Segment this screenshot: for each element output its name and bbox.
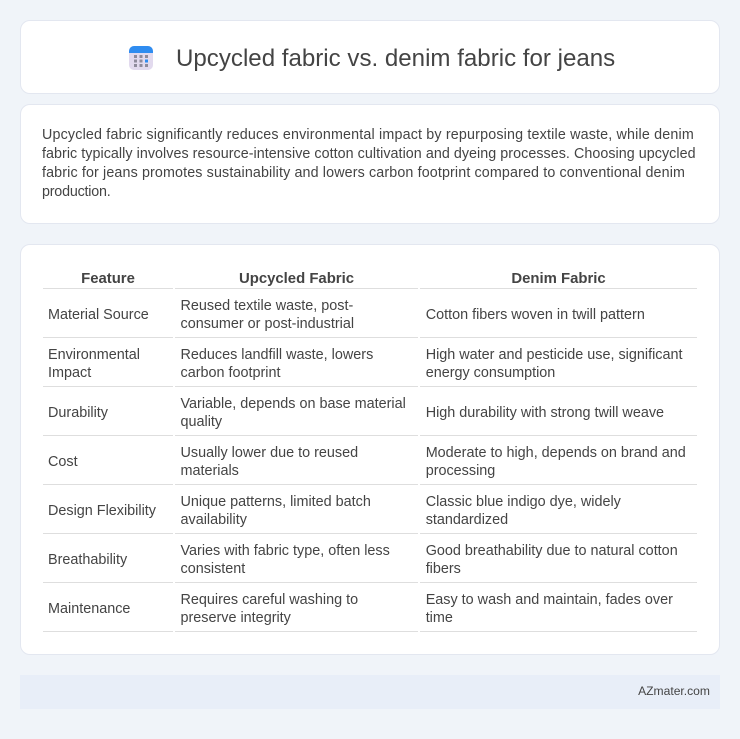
row: Environmental Impact: energy consumption [426, 365, 555, 381]
row: Maintenance: Easy to wash and maintain, fades over [426, 592, 673, 608]
row: Durability: Durability [48, 405, 108, 421]
row: Design Flexibility: availability [180, 512, 247, 528]
row: Material Source: Cotton fibers woven in twill pattern [426, 307, 645, 323]
row: Maintenance: Maintenance [48, 601, 130, 617]
row: Material Source: Reused textile waste, post- [180, 298, 353, 314]
row: Environmental Impact: High water and pesticide use, significant [426, 347, 682, 363]
row: Cost: Moderate to high, depends on brand and [426, 445, 686, 461]
row: Cost: materials [180, 463, 239, 479]
footer bar [20, 675, 720, 709]
row: Design Flexibility: standardized [426, 512, 508, 528]
row: Design Flexibility: Classic blue indigo dye, widely [426, 494, 621, 510]
summary text [42, 127, 696, 200]
column heading: Denim Fabric: Denim Fabric [511, 271, 606, 287]
row: Design Flexibility [48, 494, 621, 528]
row: Maintenance: Requires careful washing to [180, 592, 358, 608]
column heading: Upcycled Fabric: Upcycled Fabric [239, 271, 354, 287]
row: Environmental Impact: Reduces landfill waste, lowers [180, 347, 373, 363]
row: Breathability [48, 543, 678, 577]
row: Material Source: Material Source [48, 307, 149, 323]
row: Cost: Cost [48, 454, 78, 470]
row: Maintenance: time [426, 610, 453, 626]
row: Maintenance: preserve integrity [180, 610, 291, 626]
panel: title card [20, 20, 720, 94]
row: Environmental Impact [48, 347, 682, 381]
table: comparison headings [81, 271, 606, 287]
row: Design Flexibility: Unique patterns, limited batch [180, 494, 371, 510]
row: Breathability: Varies with fabric type, often less [180, 543, 390, 559]
summary text: production. [42, 184, 111, 200]
row: Breathability: Breathability [48, 552, 127, 568]
row: Breathability: fibers [426, 561, 461, 577]
panel: summary card [20, 104, 720, 224]
row: Durability: Variable, depends on base material [180, 396, 406, 412]
row: Design Flexibility: Design Flexibility [48, 503, 156, 519]
row: Environmental Impact: Impact [48, 365, 91, 381]
row: Durability [48, 396, 664, 430]
row: Cost: processing [426, 463, 495, 479]
row: Breathability: Good breathability due to natural cotton [426, 543, 678, 559]
row: Material Source [48, 298, 645, 332]
icon: calendar [129, 46, 153, 70]
summary text: fabric typically involves resource-intensive cotton cultivation and dyeing processes. Choosing upcycled [42, 146, 696, 162]
row: Cost: Usually lower due to reused [180, 445, 358, 461]
row: Material Source: consumer or post-industrial [180, 316, 354, 332]
row: Durability: quality [180, 414, 222, 430]
title: Upcycled fabric vs. denim fabric for jeans [176, 45, 615, 72]
row: Environmental Impact: Environmental [48, 347, 140, 363]
panel: comparison table card [20, 244, 720, 655]
footer credit: AZmater.com [638, 684, 710, 698]
summary text: Upcycled fabric significantly reduces environmental impact by repurposing textile waste, while denim [42, 127, 694, 143]
summary text: fabric for jeans promotes sustainability and lowers carbon footprint compared to conventional denim [42, 165, 685, 181]
row: Cost [48, 445, 686, 479]
column heading: Feature: Feature [81, 271, 135, 287]
row: Durability: High durability with strong twill weave [426, 405, 664, 421]
row: Environmental Impact: carbon footprint [180, 365, 280, 381]
row: Breathability: consistent [180, 561, 245, 577]
row: Maintenance [48, 592, 673, 626]
